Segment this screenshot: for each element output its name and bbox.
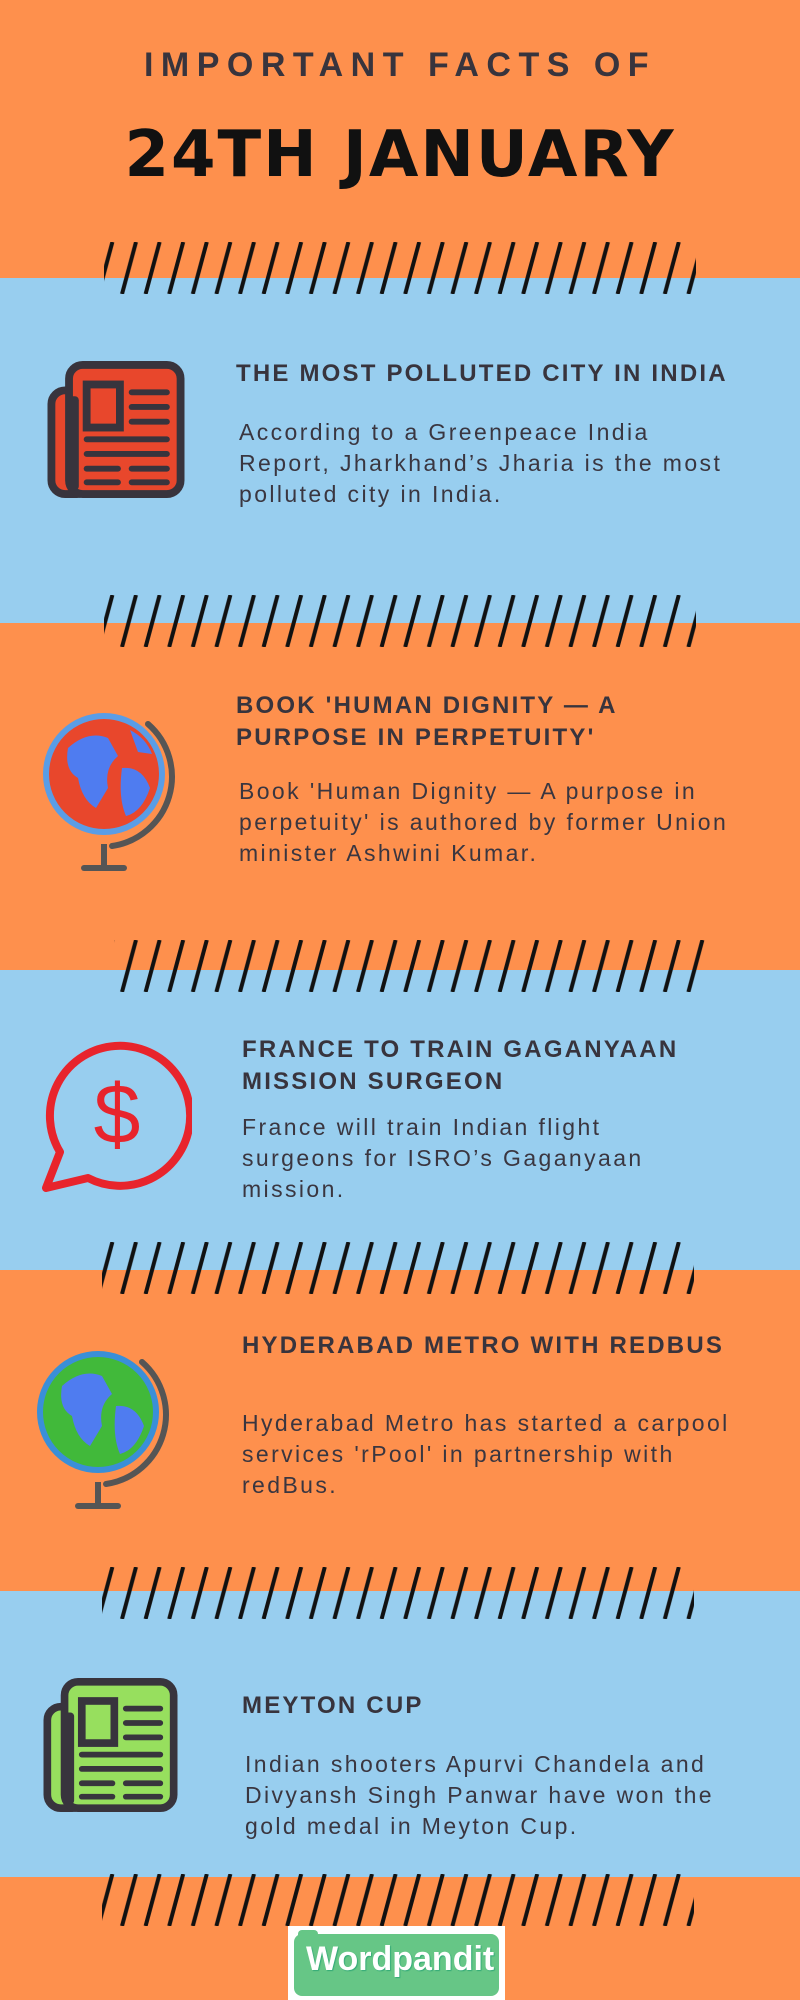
icon: globe red <box>43 713 175 871</box>
text 3: France will train Indian flight <box>242 1114 601 1140</box>
section 5 background <box>0 1591 800 1877</box>
text 1: According to a Greenpeace India <box>239 419 650 445</box>
logo: wordpandit: Wordpandit <box>306 1940 494 1978</box>
heading 4: HYDERABAD METRO WITH REDBUS <box>242 1332 724 1359</box>
text 2 <box>239 778 728 866</box>
text 3 <box>242 1114 644 1202</box>
text 2: Book 'Human Dignity — A purpose in <box>239 778 697 804</box>
heading 2: BOOK 'HUMAN DIGNITY — A <box>236 692 618 719</box>
icon: newspaper green <box>44 1678 178 1812</box>
stripes 6 <box>102 1874 694 1926</box>
heading 2 <box>236 692 618 751</box>
section 4 background <box>0 1270 800 1591</box>
heading 5: MEYTON CUP <box>242 1692 424 1719</box>
heading 3: FRANCE TO TRAIN GAGANYAAN <box>242 1036 678 1063</box>
text 2: minister Ashwini Kumar. <box>239 840 538 866</box>
text 3: surgeons for ISRO’s Gaganyaan <box>242 1145 644 1171</box>
stripes 3 <box>114 940 705 992</box>
text 4: services 'rPool' in partnership with <box>242 1441 675 1467</box>
heading 3: MISSION SURGEON <box>242 1068 504 1095</box>
text 5: Indian shooters Apurvi Chandela and <box>245 1751 706 1777</box>
title line 1: IMPORTANT FACTS OF <box>144 46 656 84</box>
stripes 1 <box>104 242 696 294</box>
text 4 <box>242 1410 730 1498</box>
icon: dollar speech bubble <box>42 1042 192 1192</box>
icon: dollar speech bubble: $ <box>94 1067 140 1161</box>
footer background <box>0 1877 800 2000</box>
section 3 background <box>0 970 800 1270</box>
heading 1: THE MOST POLLUTED CITY IN INDIA <box>236 360 728 387</box>
heading 2: PURPOSE IN PERPETUITY' <box>236 724 596 751</box>
icon: newspaper red <box>48 361 184 498</box>
stripes 5 <box>102 1567 694 1619</box>
stripes 2 <box>104 595 696 647</box>
stripes 4 <box>102 1242 694 1294</box>
header background <box>0 0 800 278</box>
text 1: Report, Jharkhand’s Jharia is the most <box>239 450 722 476</box>
text 2: perpetuity' is authored by former Union <box>239 809 728 835</box>
text 5: Divyansh Singh Panwar have won the <box>245 1782 714 1808</box>
text 5: gold medal in Meyton Cup. <box>245 1813 579 1839</box>
text 1: polluted city in India. <box>239 481 503 507</box>
icon: globe green <box>37 1351 169 1509</box>
title line 2: 24TH JANUARY <box>124 118 676 192</box>
text 4: redBus. <box>242 1472 338 1498</box>
text 4: Hyderabad Metro has started a carpool <box>242 1410 730 1436</box>
text 1 <box>239 419 722 507</box>
logo: wordpandit <box>288 1926 505 2000</box>
text 5 <box>245 1751 714 1839</box>
section 2 background <box>0 623 800 970</box>
section 1 background <box>0 278 800 623</box>
text 3: mission. <box>242 1176 346 1202</box>
heading 3 <box>242 1036 678 1095</box>
